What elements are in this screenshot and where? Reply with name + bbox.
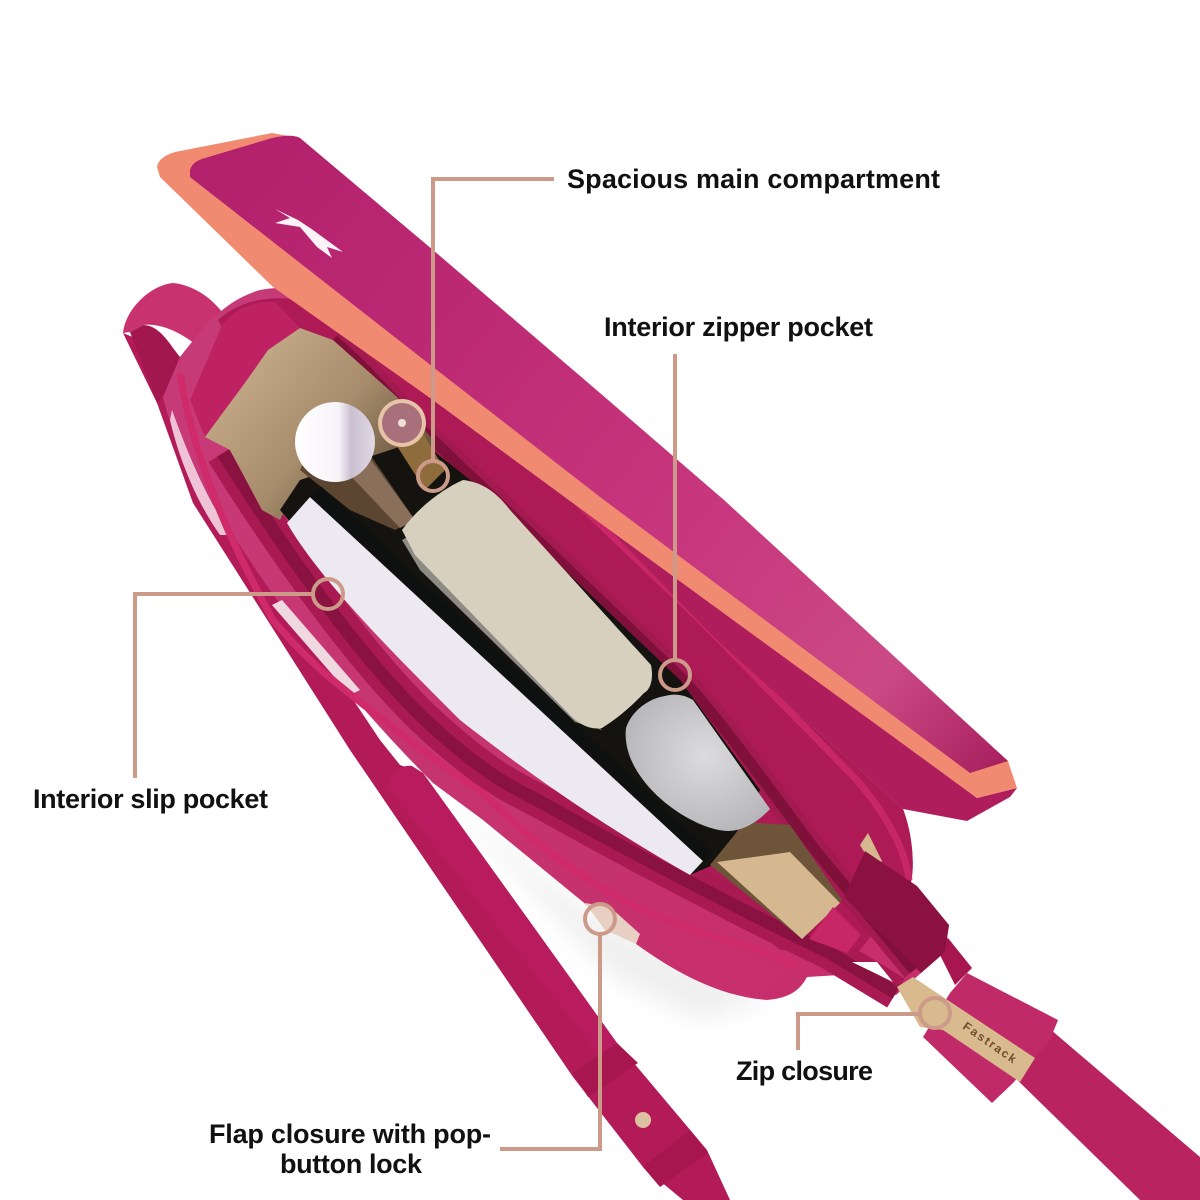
lipstick tube [295,402,415,530]
back zipper [333,340,914,970]
callout: interior zipper pocket: Interior zipper pocket [604,312,873,342]
callout: zip closure: Zip closure [736,1056,873,1086]
flap underside [600,520,1017,821]
flap salmon edging [157,133,1017,798]
callout: spacious main compartment: Spacious main compartment [567,164,940,194]
white bulb [626,695,770,831]
callout: spacious main compartment [418,164,940,491]
book [287,487,712,875]
back wall of bag interior [218,298,913,950]
back glossy rim [470,400,909,880]
zipper pull [897,977,1035,1082]
strap keeper loops [573,1043,638,1097]
callout: interior slip pocket: Interior slip pocket [33,784,268,814]
small cosmetic [378,399,445,490]
soft ground shadow [440,790,770,1020]
gap under zipper arm [852,962,893,982]
beige case [402,480,652,730]
callout: flap closure [209,904,615,1179]
interior dark cavity [280,440,760,875]
highlights on front of bag [170,410,360,695]
shoulder strap [123,333,730,1200]
front glossy rim [180,373,797,967]
open flap [157,133,1017,821]
front zipper [223,453,896,993]
zipper pull: Fastrack [960,1019,1019,1066]
bag body front [163,288,949,1000]
zipper fabric tape [844,851,949,973]
callout: interior zipper pocket [604,312,873,690]
flap top surface [190,136,1008,773]
callout: flap closure: button lock [280,1149,423,1179]
right strap end [923,938,1200,1200]
interior lining lower [710,822,882,953]
callout: interior slip pocket [33,579,343,814]
callout: zip closure [736,998,950,1086]
interior lining upper [205,328,433,520]
flap logo [275,209,343,258]
clasp [585,903,640,944]
strap loop at top-left [123,283,228,403]
callout: flap closure: Flap closure with pop- [209,1119,491,1149]
